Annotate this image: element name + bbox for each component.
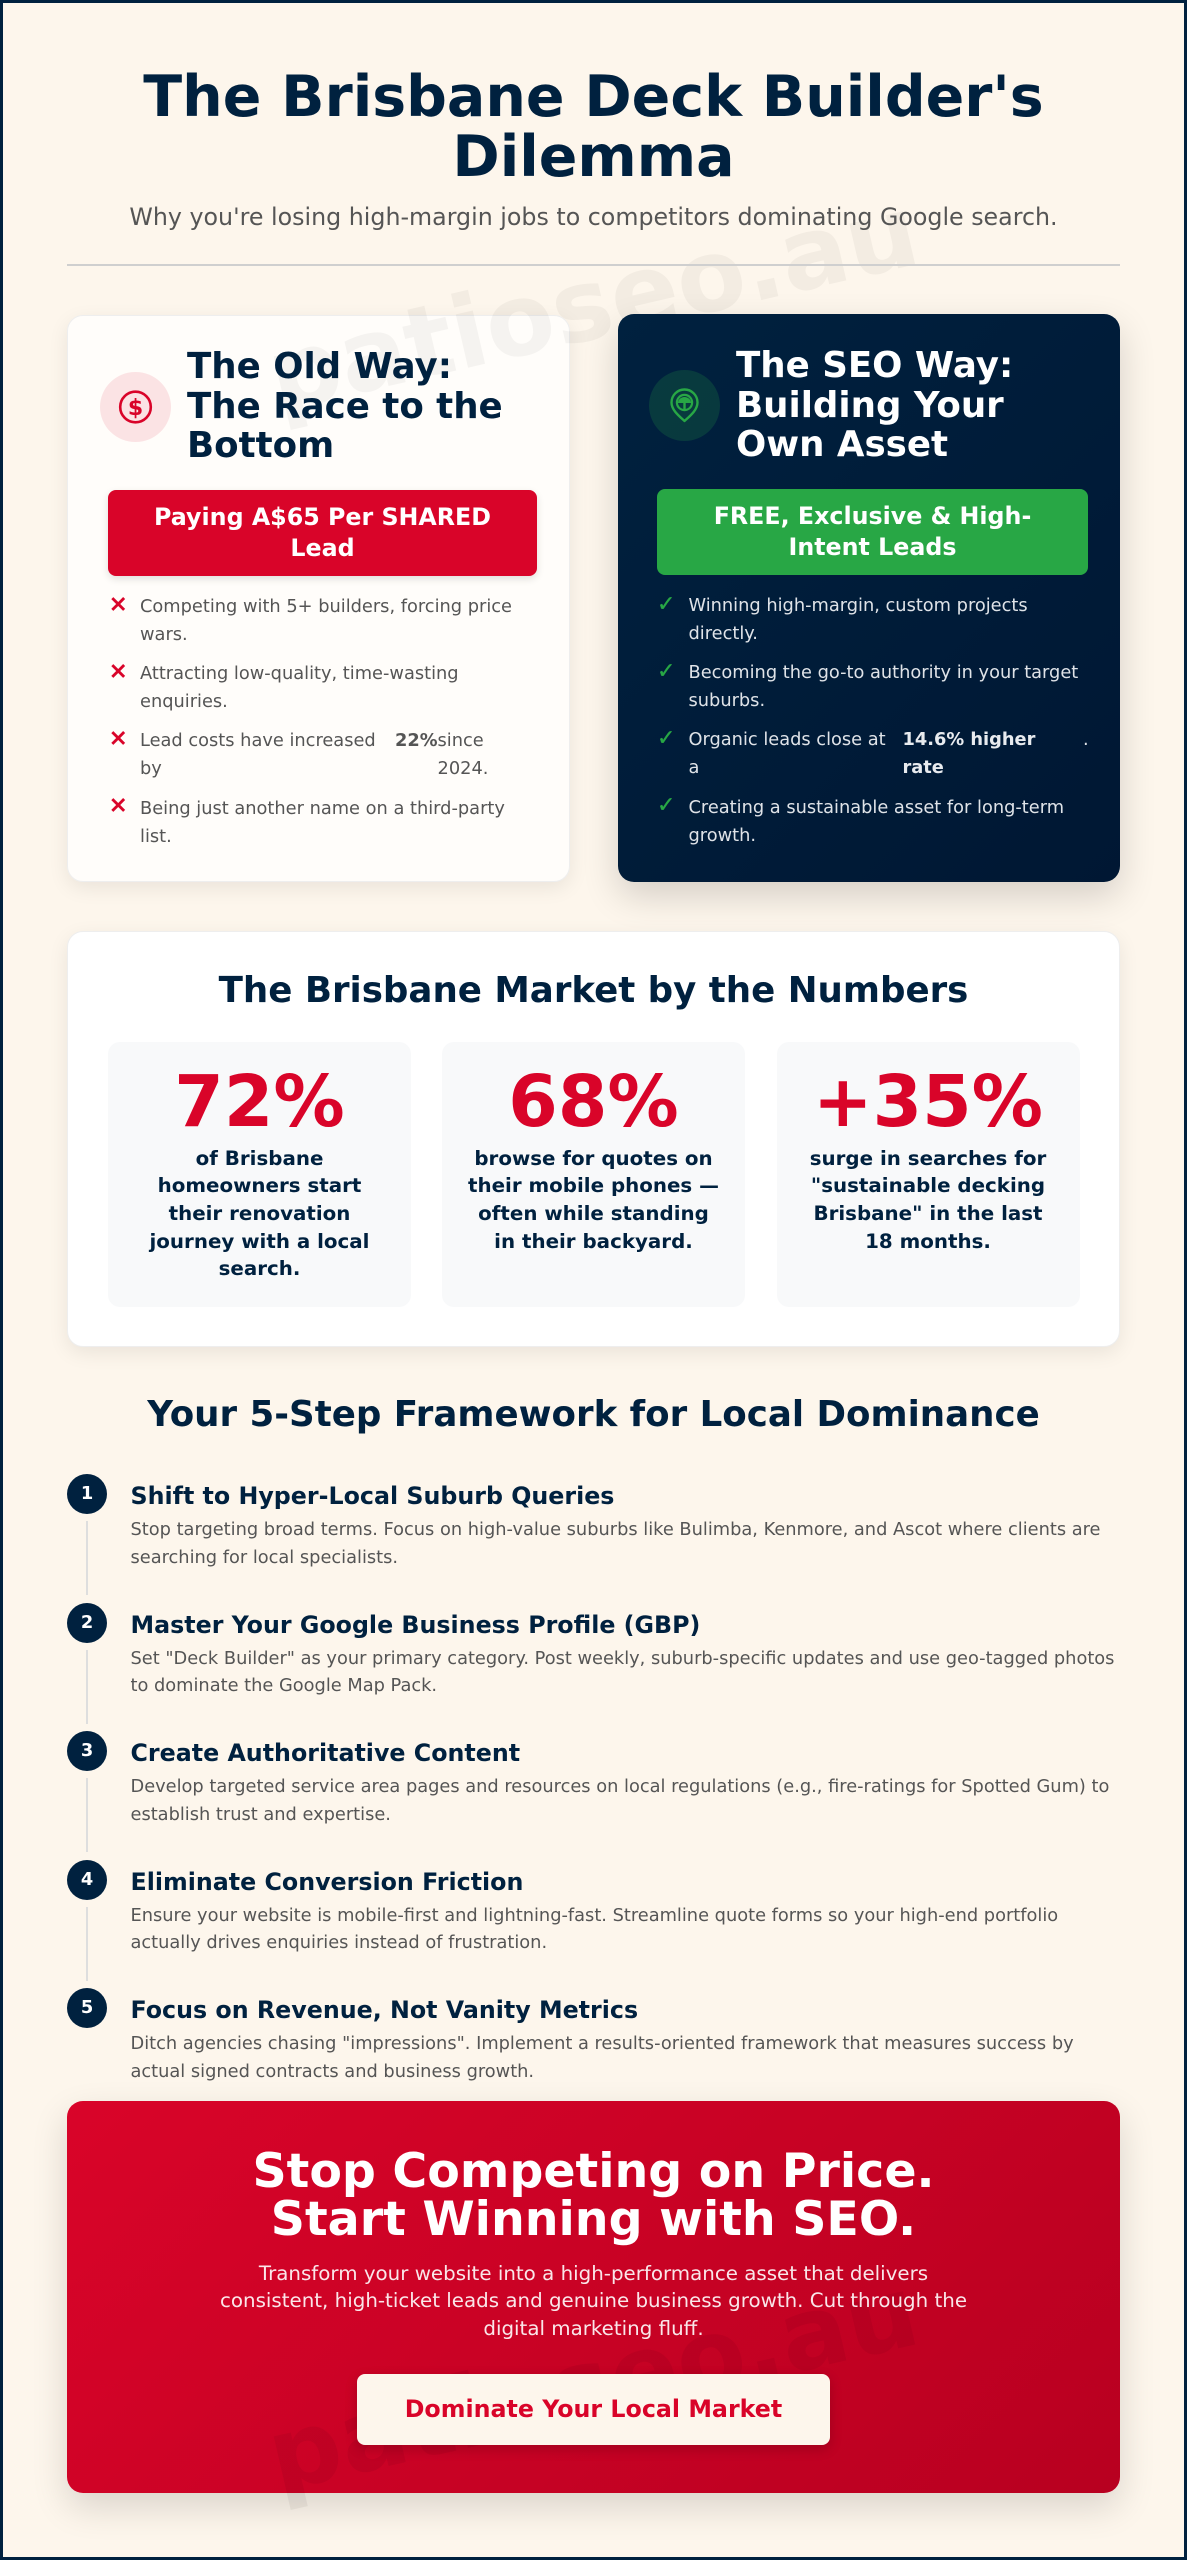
stat text 3: Brisbane" in the last xyxy=(813,1202,1043,1225)
cta heading xyxy=(252,2144,935,2247)
stat text 2: their mobile phones — xyxy=(468,1174,719,1197)
list item 3 xyxy=(688,729,886,778)
cross 4: ✕ xyxy=(109,794,127,819)
icon: dollar: $ xyxy=(128,396,143,421)
stat card 3 xyxy=(776,1042,1080,1307)
step 5 title: Focus on Revenue, Not Vanity Metrics xyxy=(130,1996,638,2024)
cta text xyxy=(220,2262,967,2340)
stat text 1: search. xyxy=(219,1257,300,1280)
step 3 text: establish trust and expertise. xyxy=(130,1804,391,1825)
heading: seo way: Building Your xyxy=(736,385,1004,426)
stat text 2 xyxy=(468,1146,719,1253)
list item 2: Becoming the go-to authority in your target xyxy=(688,662,1078,683)
check 2: ✓ xyxy=(657,659,675,684)
heading: seo way: Own Asset xyxy=(736,424,948,465)
stat text 3: surge in searches for xyxy=(810,1146,1046,1170)
stat text 3: 18 months. xyxy=(865,1230,991,1253)
heading: seo way xyxy=(736,345,1013,465)
connector 2 xyxy=(86,1650,88,1724)
stat text 2: browse for quotes on xyxy=(474,1146,713,1170)
step 4 number: 4 xyxy=(81,1868,93,1890)
panel: the old way xyxy=(67,315,570,882)
step 1 number xyxy=(67,1474,107,1514)
divider xyxy=(67,264,1120,266)
step 4 text: actually drives enquiries instead of frustration. xyxy=(130,1932,547,1953)
stat text 2: often while standing xyxy=(478,1202,709,1225)
list item 2: enquiries. xyxy=(140,691,228,712)
stat higher rate: 14.6% higher xyxy=(902,729,1035,750)
list: old way problems xyxy=(109,593,512,847)
stat card 1 xyxy=(108,1042,411,1307)
cta heading: Stop Competing on Price. xyxy=(252,2144,935,2199)
step 1 title: Shift to Hyper-Local Suburb Queries xyxy=(130,1482,614,1510)
heading: seo way: The SEO Way: xyxy=(736,345,1013,386)
badge: paying per lead xyxy=(108,490,537,576)
stat text 3 xyxy=(810,1146,1046,1253)
list item 3 end: since xyxy=(438,730,484,751)
cta text: consistent, high-ticket leads and genuine business growth. Cut through the xyxy=(220,2289,967,2312)
connector 4 xyxy=(86,1906,88,1980)
number +35%: +35% xyxy=(813,1060,1043,1142)
icon: dollar xyxy=(100,372,171,442)
stat text 1: homeowners start xyxy=(158,1174,361,1197)
check 3: ✓ xyxy=(657,726,675,751)
stat 22%: 22% xyxy=(395,730,438,751)
heading: market numbers: The Brisbane Market by the Numbers xyxy=(219,970,968,1010)
step 4 title: Eliminate Conversion Friction xyxy=(130,1868,523,1896)
list item 4 xyxy=(688,797,1064,846)
list item 3: Lead costs have increased xyxy=(140,730,376,751)
heading: framework: Your 5-Step Framework for Local Dominance xyxy=(147,1394,1040,1435)
step 5 text: actual signed contracts and business growth. xyxy=(130,2061,534,2082)
badge: free leads xyxy=(657,489,1088,575)
step 2 title: Master Your Google Business Profile (GBP) xyxy=(130,1610,700,1638)
title: Dilemma xyxy=(452,124,735,190)
step 3 text: Develop targeted service area pages and resources on local regulations (e.g., fire-ratings for Spotted Gum) to xyxy=(130,1776,1109,1797)
connector 3 xyxy=(86,1778,88,1852)
step 3 number xyxy=(67,1731,107,1771)
heading: old way xyxy=(187,346,503,466)
list item 1 xyxy=(140,596,512,645)
cross 2: ✕ xyxy=(109,660,127,685)
panel: market numbers xyxy=(67,931,1120,1347)
stat text 1: of Brisbane xyxy=(196,1146,323,1170)
step 1 text: Stop targeting broad terms. Focus on high-value suburbs like Bulimba, Kenmore, and Ascot where clients are xyxy=(130,1519,1100,1540)
list item 2: suburbs. xyxy=(688,690,765,711)
step 3 title: Create Authoritative Content xyxy=(130,1739,520,1767)
stat higher rate xyxy=(902,729,1036,778)
stat text 1 xyxy=(148,1146,369,1280)
watermark: top: patioseo.au xyxy=(257,172,929,435)
list item 4: list. xyxy=(140,826,172,847)
badge: free leads: Intent Leads xyxy=(788,533,957,561)
list item 3: Organic leads close at xyxy=(688,729,886,750)
list item 1: wars. xyxy=(140,624,188,645)
step 2 text: Set "Deck Builder" as your primary category. Post weekly, suburb-specific updates and use geo-tagged photos xyxy=(130,1648,1114,1668)
list item 4: growth. xyxy=(688,825,756,846)
heading: old way: Bottom xyxy=(187,425,334,466)
list item 1: Winning high-margin, custom projects xyxy=(688,595,1028,616)
badge: paying per lead: Paying A$65 Per SHARED xyxy=(154,503,491,531)
subtitle: Why you're losing high-margin jobs to competitors dominating Google search. xyxy=(129,203,1058,231)
badge: free leads: FREE, Exclusive & High- xyxy=(714,502,1031,530)
connector 1 xyxy=(86,1521,88,1595)
stat text 2: in their backyard. xyxy=(494,1230,693,1253)
list item 2: Attracting low-quality, time-wasting xyxy=(140,663,459,684)
title xyxy=(143,64,1044,190)
step 2 number: 2 xyxy=(81,1612,93,1632)
list item 3: by xyxy=(140,758,162,779)
step 4 number xyxy=(67,1860,107,1900)
step 5 number xyxy=(67,1988,107,2028)
step 4 text xyxy=(130,1904,1058,1953)
cross 1: ✕ xyxy=(109,593,127,618)
list item 3 xyxy=(140,730,376,779)
number 72%: 72% xyxy=(174,1060,345,1142)
stat higher rate: rate xyxy=(902,757,944,778)
panel: the seo way xyxy=(618,314,1120,882)
list item 1: directly. xyxy=(688,623,758,644)
list item 4 xyxy=(140,798,505,847)
list item 2 xyxy=(688,662,1078,711)
list item 4: Being just another name on a third-party xyxy=(140,798,505,819)
stat text 3: "sustainable decking xyxy=(811,1174,1045,1197)
list item 1 xyxy=(688,595,1028,644)
list item 3 end xyxy=(438,730,488,779)
step 2 text xyxy=(130,1648,1114,1696)
step 1 number: 1 xyxy=(81,1483,93,1504)
watermark: call to action: patioseo.au xyxy=(257,2252,929,2515)
list item 3: a xyxy=(688,757,699,778)
step 5 number: 5 xyxy=(81,1997,93,2018)
list item 3 end: 2024. xyxy=(438,758,488,779)
cta button: Dominate Your Local Market xyxy=(405,2395,782,2423)
cta button xyxy=(357,2374,830,2445)
stat text 1: journey with a local xyxy=(150,1230,369,1253)
heading: old way: The Race to the xyxy=(187,386,503,427)
list item 3 end: . xyxy=(1083,729,1089,750)
list item 2 xyxy=(140,663,459,712)
panel: call to action xyxy=(67,2101,1120,2493)
step 2 text: to dominate the Google Map Pack. xyxy=(130,1675,437,1696)
heading: old way: The Old Way: xyxy=(187,346,452,387)
cta text: digital marketing fluff. xyxy=(483,2317,704,2340)
check 4: ✓ xyxy=(657,793,675,818)
step 3 text xyxy=(130,1776,1109,1825)
list: seo way benefits xyxy=(657,592,1089,846)
number 68%: 68% xyxy=(508,1060,679,1142)
step 5 text: Ditch agencies chasing "impressions". Implement a results-oriented framework that measures success by xyxy=(130,2033,1074,2054)
icon: map pin xyxy=(649,370,720,441)
stat text 1: their renovation xyxy=(169,1202,350,1225)
step 1 text: searching for local specialists. xyxy=(130,1547,398,1568)
list item 1: Competing with 5+ builders, forcing price xyxy=(140,596,512,617)
stat card 2 xyxy=(442,1042,745,1307)
step 5 text xyxy=(130,2033,1074,2082)
step 2 number xyxy=(67,1602,107,1642)
badge: paying per lead: Lead xyxy=(290,534,355,562)
cross 3: ✕ xyxy=(109,727,127,752)
step 3 number: 3 xyxy=(81,1740,93,1761)
title: The Brisbane Deck Builder's xyxy=(143,64,1044,130)
cta heading: Start Winning with SEO. xyxy=(271,2192,916,2247)
list item 4: Creating a sustainable asset for long-term xyxy=(688,797,1064,818)
check 1: ✓ xyxy=(657,592,675,617)
cta text: Transform your website into a high-performance asset that delivers xyxy=(259,2262,928,2284)
step 1 text xyxy=(130,1519,1100,1568)
step 4 text: Ensure your website is mobile-first and lightning-fast. Streamline quote forms so your high-end portfolio xyxy=(130,1904,1058,1926)
